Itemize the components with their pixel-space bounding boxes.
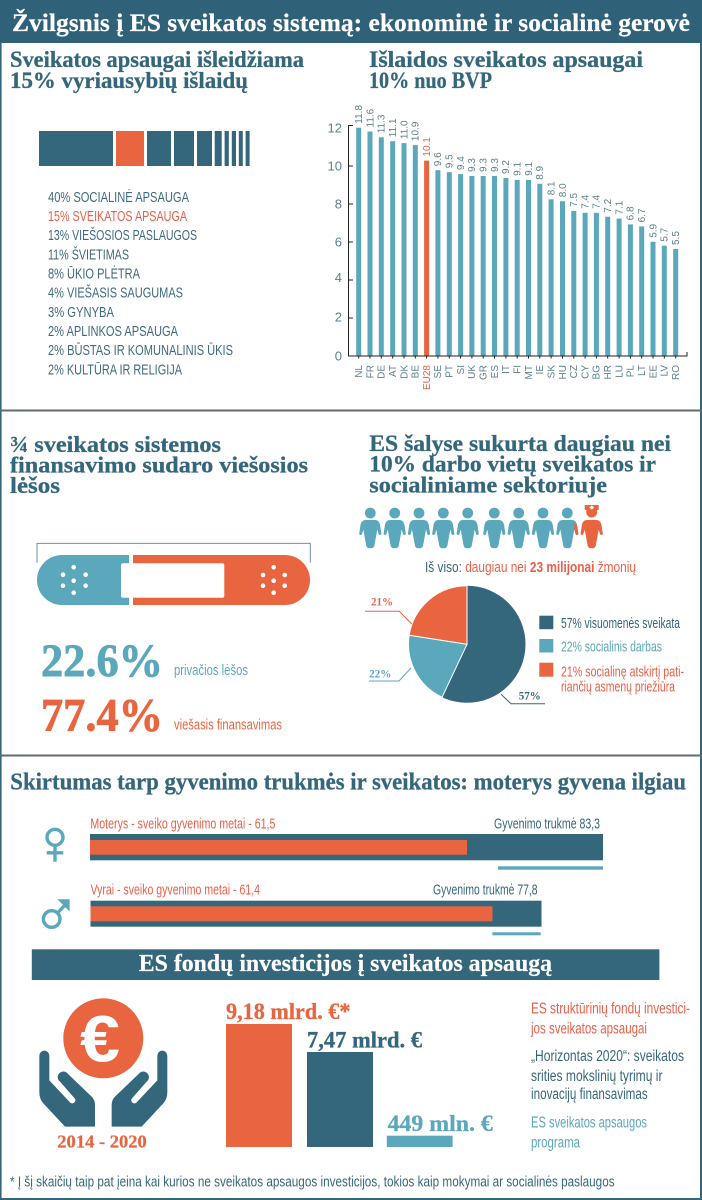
icon: female symbol (47, 829, 63, 862)
title banner: Žvilgsnis į ES sveikatos sistemą: ekonominė ir socialinė gerovė (12, 9, 690, 37)
panel: health spending as share of GDP (328, 47, 687, 390)
icon: hands holding euro coin (39, 998, 167, 1127)
heading: financing (10, 432, 308, 498)
text: structural funds (530, 1000, 690, 1038)
bar values: 9.4 (456, 156, 467, 170)
women row: Moterys - sveiko gyvenimo metai - 61,5 (90, 816, 275, 832)
bar values: 5.9 (648, 223, 659, 238)
text: Horizon 2020: srities mokslinių tyrimų ir (531, 1068, 662, 1085)
spending category list: 11% ŠVIETIMAS (48, 246, 129, 264)
country labels: FR (365, 365, 376, 378)
bar values: 6.7 (637, 208, 648, 222)
country labels: AT (388, 365, 399, 377)
bar values: 7.2 (603, 198, 614, 213)
stat: private funds: privačios lėšos (174, 662, 248, 679)
heading: government spending (10, 47, 304, 93)
bar values: 10.1 (422, 137, 433, 157)
country labels: PT (445, 365, 456, 378)
panel: EU fund investments (39, 998, 690, 1152)
country labels: DE (377, 365, 388, 379)
bar: structural funds: 9,18 mlrd. €* (226, 999, 350, 1024)
country labels: SE (433, 365, 444, 378)
country labels: LT (637, 365, 648, 376)
bar values: 10.9 (411, 121, 422, 141)
country labels: PL (626, 365, 637, 377)
men row: Vyrai - sveiko gyvenimo metai - 61,4 (90, 882, 260, 898)
country labels: EU28 (422, 365, 433, 390)
bar values: 9.1 (512, 162, 524, 176)
icon: male symbol (43, 899, 70, 927)
panel: jobs (359, 431, 684, 704)
panel: government spending (10, 47, 304, 378)
heading: financing: lėšos (10, 473, 60, 498)
stat: public funding: 77.4% (41, 690, 163, 742)
heading: life expectancy: Skirtumas tarp gyvenimo trukmės ir sveikatos: moterys gyvena ilgiau (10, 769, 686, 795)
country labels: CY (580, 365, 591, 379)
bar values: 11.0 (399, 120, 410, 139)
y axis: 0 (335, 348, 342, 364)
pie label 22% (369, 668, 411, 681)
country labels: LV (660, 365, 671, 376)
heading: jobs: socialiniame sektoriuje (369, 472, 607, 497)
women row: Gyvenimo trukmė 83,3 (494, 816, 600, 832)
country labels: RO (671, 365, 682, 380)
y axis: 8 (335, 196, 342, 212)
country labels: MT (524, 365, 535, 379)
heading: share of GDP: Išlaidos sveikatos apsaugai (369, 47, 644, 72)
bar: structural funds (226, 999, 350, 1147)
spending category list: 40% SOCIALINĖ APSAUGA (48, 188, 189, 206)
country labels: HR (603, 365, 614, 379)
country labels: BG (592, 365, 603, 379)
heading: share of GDP (369, 47, 644, 93)
pie legend (539, 615, 684, 696)
banner: EU funds: ES fondų investicijos į sveikatos apsaugą (139, 951, 552, 977)
men row (90, 882, 542, 935)
women row (90, 816, 603, 870)
stat: private funds (41, 635, 248, 687)
pie legend: 22% socialinis darbas (561, 639, 662, 656)
bar values: 9.2 (501, 160, 512, 174)
bar values: 11.3 (377, 114, 388, 133)
bar values: 9.3 (490, 158, 501, 172)
country labels: HU (558, 365, 569, 379)
y axis: 6 (335, 234, 342, 250)
bar values: 5.5 (671, 231, 682, 245)
heading: government spending: Sveikatos apsaugai išleidžiama (10, 47, 304, 72)
country labels: LU (614, 365, 625, 378)
panel: life expectancy (10, 769, 686, 935)
heading: financing: ¾ sveikatos sistemos (10, 432, 221, 457)
segmented spending bar (39, 131, 250, 166)
bar values: 8.0 (558, 183, 569, 197)
title banner (0, 0, 702, 43)
stat: public funding (41, 690, 282, 742)
text: Horizon 2020 (531, 1048, 684, 1103)
stat: private funds: 22.6% (41, 635, 163, 687)
country labels: EE (648, 365, 659, 378)
country labels: CZ (569, 365, 580, 378)
heading: jobs: 10% darbo vietų sveikatos ir (369, 452, 656, 477)
stat: public funding: viešasis finansavimas (174, 716, 282, 734)
bar values: 9.3 (478, 158, 490, 172)
spending category list: 3% GYNYBA (48, 305, 114, 321)
bar values: 7.4 (592, 194, 603, 209)
pie label 21% (365, 597, 412, 624)
country labels: NL (354, 365, 365, 378)
bar values: 9.3 (467, 158, 478, 172)
spending category list: 2% KULTŪRA IR RELIGIJA (48, 362, 182, 378)
text: health programme: ES sveikatos apsaugos (531, 1115, 647, 1132)
y axis (328, 120, 353, 364)
spending category list: 2% APLINKOS APSAUGA (48, 324, 178, 340)
country labels: ES (490, 365, 501, 378)
heading: jobs (369, 431, 672, 497)
heading: share of GDP: 10% nuo BVP (369, 68, 492, 93)
spending category list: 15% SVEIKATOS APSAUGA (48, 209, 187, 225)
pie label 21%: 21% (371, 597, 393, 609)
bar values: 7.1 (614, 200, 625, 215)
text: structural funds: jos sveikatos apsaugai (530, 1021, 647, 1038)
y axis: 12 (328, 120, 342, 136)
bar values: 9.5 (445, 154, 456, 168)
pie label 57% (501, 690, 545, 704)
country labels: SI (456, 365, 467, 374)
country labels: GR (478, 365, 490, 380)
bar values: 8.1 (546, 181, 557, 195)
heading: jobs: ES šalyse sukurta daugiau nei (369, 431, 672, 456)
bars (356, 128, 678, 356)
bar values: 7.4 (580, 194, 591, 209)
country labels (354, 365, 682, 390)
bar values: 11.1 (388, 118, 399, 137)
country labels: FI (512, 365, 524, 374)
bar values: 7.5 (569, 193, 580, 207)
banner: EU funds (32, 949, 659, 980)
bar: Horizon 2020: 7,47 mlrd. € (307, 1027, 422, 1052)
bar values: 11.8 (354, 105, 365, 124)
bar: health programme: 449 mln. € (388, 1111, 493, 1136)
country labels: BE (411, 365, 422, 378)
bar chart: GDP share by country (328, 105, 687, 390)
text: Horizon 2020: inovacijų finansavimas (531, 1086, 648, 1103)
pie chart: job sectors (365, 586, 545, 704)
period label: 2014 - 2020 (57, 1132, 147, 1152)
bar values: 9.1 (524, 162, 535, 176)
heading: financing: finansavimo sudaro viešosios (10, 453, 308, 478)
pie label 22%: 22% (369, 669, 391, 681)
icon: hands holding euro coin: € (80, 1002, 120, 1076)
icon: row of people (359, 505, 603, 548)
country labels: UK (467, 365, 478, 379)
text: health programme (531, 1115, 647, 1152)
spending category list: 2% BŪSTAS IR KOMUNALINIS ŪKIS (48, 343, 233, 359)
spending category list (48, 188, 233, 378)
spending category list: 8% ŪKIO PLĖTRA (48, 264, 140, 282)
text: health programme: programa (531, 1135, 580, 1152)
bar values: 8.9 (535, 165, 546, 180)
country labels: SK (546, 365, 557, 378)
men row: Gyvenimo trukmė 77,8 (433, 882, 538, 898)
y axis: 4 (335, 270, 342, 285)
bar: health programme (387, 1111, 493, 1147)
heading: government spending: 15% vyriausybių išlaidų (10, 68, 248, 93)
icon: plaster split chart (37, 543, 310, 605)
spending category list: 13% VIEŠOSIOS PASLAUGOS (48, 227, 197, 244)
bar values: 9.6 (433, 152, 444, 166)
country labels: IT (501, 365, 512, 374)
country labels: DK (399, 365, 410, 379)
y axis: 10 (328, 158, 342, 174)
country labels: IE (535, 365, 546, 374)
bar values (354, 105, 682, 245)
bar values: 11.6 (365, 108, 376, 128)
spending category list: 4% VIEŠASIS SAUGUMAS (48, 284, 183, 302)
panel: financing (10, 432, 310, 742)
y axis: 2 (335, 310, 342, 324)
bar: Horizon 2020 (307, 1027, 422, 1147)
pie label 57%: 57% (519, 690, 541, 702)
bar values: 6.8 (626, 206, 637, 220)
total workers line: Iš viso: daugiau nei 23 milijonai žmonių (425, 559, 636, 576)
bar values: 5.7 (660, 227, 671, 242)
